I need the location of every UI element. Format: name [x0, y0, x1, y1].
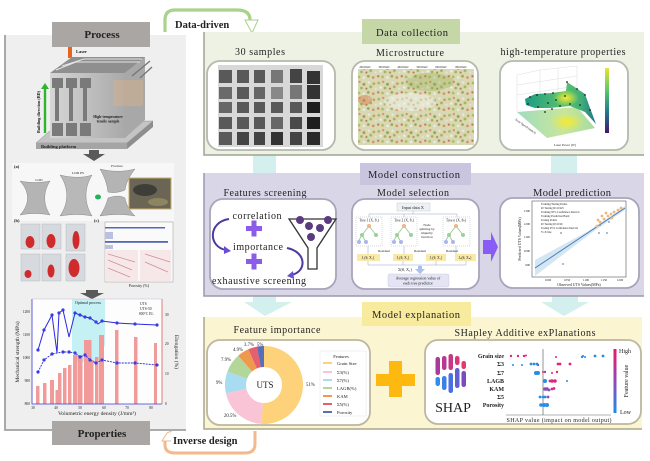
diagram: printed block: Laser: [76, 49, 87, 54]
card: model selection: Tree n (X, θₙ): [446, 218, 467, 224]
chart: SHAP beeswarm: Σ3: [497, 362, 504, 368]
card: microstructure: [352, 48, 478, 150]
chart: strength and elongation: 80: [149, 406, 153, 410]
icon: SHAP logo: SHAP: [435, 401, 471, 416]
chart: strength and elongation: 900: [25, 379, 30, 383]
chart: donut UTS: [216, 343, 315, 419]
heading: process: Process: [84, 29, 120, 41]
card: model prediction: R² Testing R²=0.99: [541, 223, 563, 226]
chart: strength and elongation: UTS: [140, 302, 147, 306]
card: model selection: Residual: [414, 249, 426, 253]
legend: features: Σ5(%): [337, 402, 349, 407]
arrow: process to fracture: [83, 150, 105, 161]
chart: strength and elongation: 800°C EL: [139, 312, 154, 316]
chart: strength and elongation: 0: [165, 402, 167, 406]
card: microstructure: 600J/mm³: [435, 66, 447, 69]
arrow: pores to properties: [80, 290, 104, 299]
chart: strength and elongation: 60: [102, 406, 106, 410]
card: model prediction: 1200: [524, 222, 530, 226]
chart: porosity profile: Porosity (%): [129, 283, 150, 288]
arrow: data-driven: Data-driven: [175, 20, 229, 31]
card: model selection: J₁(θ, X₁): [362, 256, 375, 261]
legend: features: Σ7(%): [337, 378, 349, 383]
heading: model construction: Model construction: [368, 170, 461, 181]
card: model selection: Jₙ(θ, Xₙ): [459, 256, 472, 261]
card: 30 samples: 30 samples: [235, 47, 285, 58]
arrow: selection to prediction: [483, 232, 498, 262]
panel: process: [5, 22, 186, 445]
card: feature importance: Feature importance: [234, 325, 321, 336]
chart: SHAP beeswarm: [478, 349, 632, 424]
chart: strength and elongation: 30: [165, 313, 169, 317]
card: high-temperature properties: Scan Speed (mm/s): [514, 117, 537, 135]
chart: strength and elongation: Mechanical strength (MPa): [14, 321, 21, 383]
arrow: inverse design: [162, 431, 255, 453]
chart: porosity profile: (c): [94, 218, 99, 223]
legend: features: [320, 351, 366, 416]
card: SHAP explanations: SHapley Additive exPlanations: [454, 328, 596, 339]
card: model selection: J₃(θ, X₃): [430, 256, 443, 261]
card: model prediction: 1050: [564, 278, 571, 282]
heading: process: [52, 22, 150, 47]
card: high-temperature properties: Laser Power (W): [554, 143, 576, 147]
card: model prediction: 1300: [524, 209, 530, 213]
legend: features: Features: [333, 354, 349, 359]
card: model selection: Node: [423, 223, 431, 227]
card: model prediction: 900: [525, 263, 530, 267]
chart: SHAP beeswarm: Σ7: [497, 371, 504, 377]
heading: model explanation: Model explanation: [372, 310, 461, 321]
chart: strength and elongation: 1100: [23, 333, 30, 337]
card: model prediction: 1200: [617, 278, 624, 282]
chart: donut UTS: UTS: [256, 380, 274, 390]
heading: properties: Properties: [78, 428, 127, 440]
heading: model explanation: [362, 302, 471, 326]
card: model prediction: Training/Testing Points: [541, 203, 567, 206]
chart: strength and elongation: 10: [165, 372, 169, 376]
chart: donut UTS: 51%: [306, 383, 315, 388]
card: model prediction: 1000: [545, 278, 552, 282]
card: model prediction: 1100: [524, 235, 530, 239]
card: model selection: Tree 1 (X, θ₁): [359, 218, 380, 224]
chart: strength and elongation: 70: [125, 406, 129, 410]
chart: donut UTS: 5%: [257, 343, 263, 348]
chart: donut UTS: 3.7%: [244, 343, 254, 348]
diagram: printed block: tensile sample: [97, 120, 120, 124]
chart: SHAP beeswarm: KAM: [489, 387, 504, 393]
chart: strength and elongation: Volumetric energy density (J/mm³): [58, 410, 136, 417]
card: model prediction: Model prediction: [533, 188, 612, 199]
card: model selection: Σ(θ, X₁): [398, 267, 413, 273]
arrow: inverse design: Inverse design: [173, 436, 238, 447]
chart: SHAP beeswarm: SHAP value (impact on model output): [506, 417, 612, 424]
diagram: printed block: Building platform: [41, 144, 77, 149]
card: model selection: splitting by: [419, 227, 435, 231]
card: high-temperature properties: [500, 47, 628, 150]
chart: strength and elongation: [14, 299, 180, 417]
panel: fracture specimens: (a): [14, 164, 20, 169]
card: features screening: exhaustive screening: [212, 276, 306, 287]
card: SHAP explanations: [425, 328, 641, 424]
heading: data collection: [362, 19, 460, 44]
chart: strength and elongation: 30: [31, 406, 35, 410]
panel: fracture specimens: LOD PS: [72, 171, 84, 175]
card: model prediction: [500, 188, 639, 288]
card: model selection: [352, 188, 479, 289]
card: model prediction: Testing 95% Confidence Interval: [541, 227, 578, 230]
card: model prediction: R² Testing R²=0.925: [541, 207, 564, 210]
legend: features: LAGB(%): [337, 386, 357, 391]
chart: strength and elongation: 40: [54, 406, 58, 410]
chart: strength and elongation: 1000: [23, 356, 30, 360]
legend: features: Σ3(%): [337, 370, 349, 375]
chart: SHAP beeswarm: Feature value: [624, 364, 630, 397]
chart: strength and elongation: 50: [78, 406, 82, 410]
card: model selection: Average regression value of: [396, 276, 441, 280]
chart: strength and elongation: 800: [25, 402, 30, 406]
card: model prediction: Training 95% Confidence Interval: [541, 211, 580, 214]
card: model prediction: Testing Points: [541, 219, 557, 222]
panel: model explanation: [204, 302, 642, 429]
card: features screening: Features screening: [224, 188, 306, 199]
card: microstructure: Microstructure: [376, 48, 445, 59]
arrows: flow between panels: [244, 155, 589, 316]
card: high-temperature properties: high-temperature properties: [500, 47, 626, 58]
card: model selection: impurity: [421, 231, 433, 235]
diagram: printed block: Building direction (BD): [36, 90, 41, 133]
chart: strength and elongation: 20: [165, 342, 169, 346]
chart: strength and elongation: 1200: [23, 310, 30, 314]
card: microstructure: 300J/mm³: [378, 66, 390, 69]
legend: features: Porosity: [337, 410, 353, 415]
chart: SHAP beeswarm: Σ5: [497, 395, 504, 401]
legend: features: KAM: [337, 394, 348, 399]
panel: fracture specimens: LOD: [35, 178, 43, 182]
chart: porosity profile: [94, 218, 173, 288]
chart: SHAP beeswarm: LAGB: [487, 379, 504, 385]
panel: fracture specimens: Fracture: [111, 164, 123, 168]
card: feature importance: [207, 325, 370, 425]
arrow: data-driven: [165, 10, 258, 33]
chart: donut UTS: 7.9%: [221, 358, 231, 363]
icon: SHAP logo: [435, 354, 471, 416]
card: model prediction: Predicted UTS Values(MPa): [518, 217, 522, 261]
diagram: printed block: [36, 47, 153, 149]
chart: SHAP beeswarm: Porosity: [483, 403, 504, 409]
card: model selection: J₂(θ, X₂): [397, 256, 410, 261]
card: features screening: correlation: [232, 211, 282, 222]
heading: model construction: [360, 163, 471, 185]
icon: plus: [376, 361, 415, 397]
card: model selection: Residual: [378, 249, 390, 253]
card: model selection: each tree predictor: [403, 280, 434, 286]
panel: pore 3D views: (b): [14, 218, 20, 223]
chart: strength and elongation: Optimal process: [75, 300, 101, 305]
diagram: printed block: High-temperature: [93, 115, 123, 119]
chart: SHAP beeswarm: High: [619, 349, 631, 355]
heading: properties: [52, 421, 150, 445]
card: microstructure: 500J/mm³: [416, 66, 428, 69]
card: model prediction: 1150: [601, 278, 608, 282]
card: model prediction: 1100: [583, 278, 590, 282]
card: model prediction: 1000: [524, 249, 530, 253]
panel: pore 3D views: [14, 218, 85, 281]
panel: model construction: [204, 163, 644, 296]
chart: donut UTS: 9%: [216, 381, 222, 386]
chart: SHAP beeswarm: Grain size: [478, 354, 504, 360]
panel: data collection: [204, 19, 644, 155]
chart: strength and elongation: Elongation (%): [173, 335, 180, 369]
card: model selection: Model selection: [377, 188, 449, 199]
card: microstructure: 200J/mm³: [359, 66, 371, 69]
chart: donut UTS: 20.5%: [224, 414, 236, 419]
card: model selection: Tree 2 (X, θ₂): [394, 218, 415, 224]
chart: strength and elongation: UTS-50: [140, 307, 152, 311]
card: 30 samples: [207, 47, 335, 150]
card: model prediction: Training Prediction Band: [541, 215, 570, 218]
card: features screening: importance: [233, 242, 284, 253]
card: model selection: function: [421, 235, 433, 239]
card: model selection: Residual: [446, 249, 458, 253]
legend: features: Grain Size: [337, 361, 357, 366]
card: model prediction: Y=X line: [541, 231, 552, 234]
panel: fracture specimens: [12, 163, 174, 221]
card: microstructure: 800J/mm³: [455, 66, 467, 69]
chart: donut UTS: 4.9%: [233, 348, 243, 353]
card: features screening: [210, 188, 336, 289]
heading: data collection: Data collection: [376, 28, 449, 39]
card: model prediction: Observed UTS Values(MPa): [557, 283, 601, 287]
chart: SHAP beeswarm: Low: [620, 410, 632, 416]
card: microstructure: 400J/mm³: [397, 66, 409, 69]
card: model selection: Input data X: [402, 205, 425, 210]
